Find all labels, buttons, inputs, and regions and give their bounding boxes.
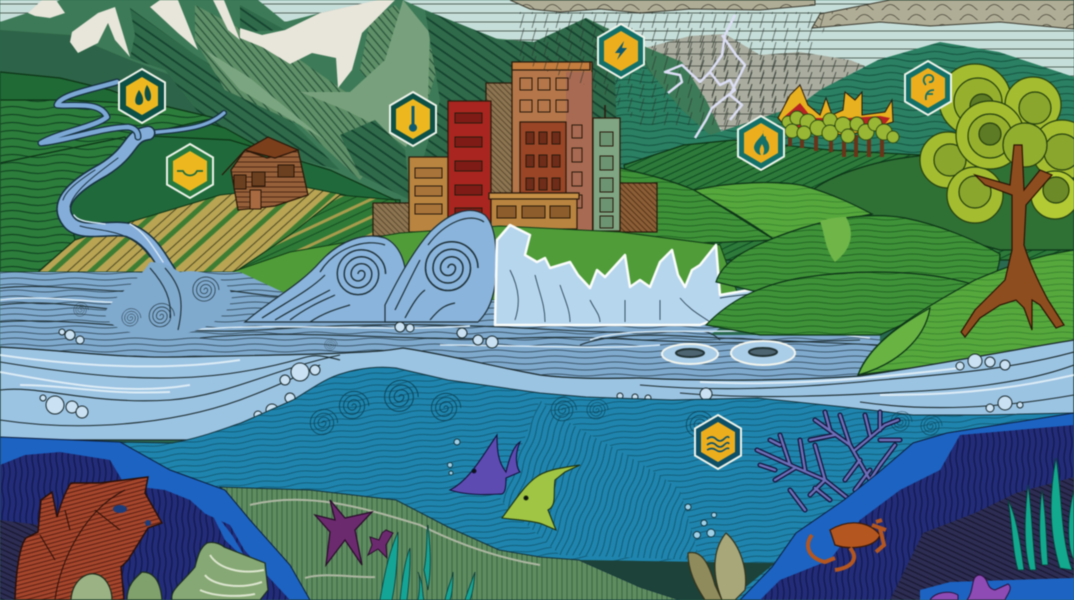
upper water layer bbox=[0, 272, 880, 410]
surface water bbox=[0, 272, 880, 410]
deep green hill bbox=[810, 155, 1074, 250]
burning trees bbox=[778, 85, 899, 157]
mountains bbox=[0, 0, 730, 240]
house bbox=[222, 137, 308, 210]
swirling wave crests bbox=[245, 210, 496, 322]
storm clouds bbox=[510, 0, 1074, 29]
river mouth swirl bbox=[105, 262, 232, 336]
seagrass left bbox=[380, 525, 475, 600]
icon: ocean waves hazard badge bbox=[695, 415, 741, 469]
rolling hills, right side bbox=[620, 140, 1074, 260]
tall brown tower bbox=[512, 62, 592, 230]
diagonal rain streaks bbox=[515, 12, 835, 125]
front hills right bbox=[706, 216, 1074, 375]
icon: wind swirl hazard badge bbox=[905, 61, 951, 115]
river bbox=[41, 82, 224, 272]
upper left field bbox=[0, 100, 215, 165]
purple branching coral bbox=[757, 412, 900, 510]
left rock reef bbox=[0, 437, 475, 600]
icon: water drops hazard badge bbox=[119, 69, 165, 123]
wave swirl lines bbox=[262, 218, 484, 322]
hatched block, right bbox=[620, 183, 657, 232]
wave crest one bbox=[245, 236, 406, 322]
dark left slope bbox=[0, 30, 225, 130]
far right teal hill bbox=[615, 42, 1074, 230]
tan tower bbox=[409, 157, 448, 232]
tan striped field bbox=[38, 186, 345, 272]
hatched mountain faces bbox=[130, 8, 340, 170]
far right hill bbox=[858, 250, 1074, 375]
light crest patch bbox=[820, 217, 851, 262]
starfish small bbox=[368, 530, 393, 558]
ocean current panel bbox=[500, 400, 700, 560]
lower front hill bbox=[706, 272, 975, 335]
house roof bbox=[222, 137, 298, 175]
light green hill bbox=[694, 183, 872, 240]
inner red-brown tower bbox=[520, 122, 566, 196]
light water band bbox=[0, 322, 1074, 440]
dark seabed strip bbox=[579, 560, 775, 600]
flames bbox=[778, 85, 893, 135]
clam bbox=[688, 533, 746, 600]
starfish large bbox=[315, 500, 372, 565]
mid green hill bbox=[620, 168, 775, 245]
eddies, right bbox=[662, 341, 795, 365]
pink coral bbox=[930, 575, 1010, 600]
icon: thermometer hazard badge bbox=[390, 92, 436, 146]
canopy bbox=[920, 64, 1074, 223]
water highlights bbox=[0, 298, 870, 347]
tree trunks bbox=[788, 135, 884, 157]
bubbles near fish and clam bbox=[448, 439, 716, 538]
hatched tower, back bbox=[486, 83, 514, 198]
ocean bbox=[120, 367, 1074, 600]
foam bubbles bbox=[40, 322, 1023, 419]
hatched block, left bbox=[373, 203, 410, 236]
icon: wildfire hazard badge bbox=[738, 116, 784, 170]
snow caps bbox=[28, 0, 395, 88]
trunk and roots bbox=[961, 145, 1064, 337]
lower left field bbox=[0, 137, 130, 272]
green seabed bbox=[220, 487, 775, 600]
tree foliage bbox=[782, 111, 899, 143]
green fish bbox=[502, 465, 580, 530]
mid slope bbox=[40, 135, 395, 272]
green striped field bbox=[235, 195, 410, 272]
rear front hill bbox=[716, 216, 1000, 295]
light ridge bbox=[300, 0, 430, 147]
farm fields bbox=[38, 186, 410, 272]
house walls bbox=[231, 150, 308, 210]
dark hatched hill bbox=[624, 140, 1074, 260]
lightning bbox=[665, 15, 745, 138]
green corals bbox=[71, 542, 268, 600]
breaking foam wave bbox=[495, 225, 778, 325]
wave crest two bbox=[385, 210, 496, 322]
seagrass right bbox=[1008, 458, 1074, 570]
sky bbox=[0, 0, 1074, 200]
icon: depression hazard badge bbox=[167, 144, 213, 198]
low front building bbox=[489, 193, 579, 229]
right rock reef bbox=[688, 413, 1074, 600]
icon: lightning hazard badge bbox=[598, 24, 644, 78]
back hill bbox=[0, 72, 400, 250]
purple fish bbox=[450, 435, 520, 495]
crab bbox=[808, 520, 886, 570]
city bbox=[373, 62, 657, 236]
grey storm hill bbox=[645, 34, 865, 135]
band stream lines bbox=[0, 352, 1074, 426]
central green ground bbox=[232, 226, 740, 300]
band highlights bbox=[0, 355, 1074, 395]
left hills bbox=[0, 72, 400, 272]
red tower bbox=[448, 101, 491, 229]
ocean spirals bbox=[310, 380, 942, 437]
green tower bbox=[593, 105, 620, 231]
red coral bbox=[15, 477, 162, 600]
mountain range base bbox=[0, 0, 730, 240]
house windows and door bbox=[234, 165, 294, 209]
large tree bbox=[920, 64, 1074, 337]
water lines and eddies bbox=[0, 286, 880, 350]
